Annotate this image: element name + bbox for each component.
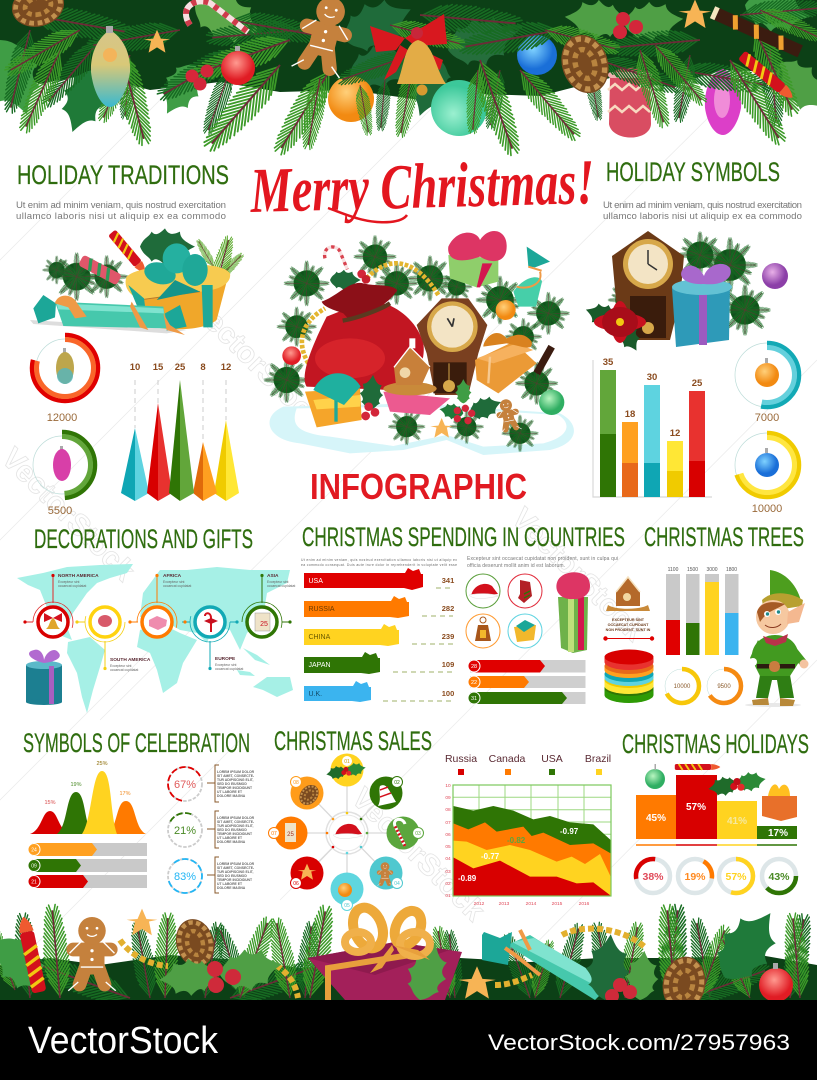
text block: 21%: SIT AMET, CONSECTE- <box>217 820 254 824</box>
pine <box>608 232 770 336</box>
text block: 21% <box>207 811 255 848</box>
ribbon bars: spending by country: USA <box>308 578 323 585</box>
glass bulb <box>91 26 130 107</box>
map node: africa <box>128 573 191 642</box>
holiday icons <box>645 764 797 821</box>
segment 01: 01 <box>344 759 350 765</box>
heading: decorations and gifts: DECORATIONS AND GIFTS <box>34 524 253 554</box>
text: trees caption: OCCAECAT CUPIDANT <box>608 623 649 627</box>
text block: 83%: TUR ADIPISCING ELIT, <box>217 870 254 874</box>
berries <box>186 64 214 90</box>
pine clusters <box>264 235 570 452</box>
map node: asia: ASIA <box>267 573 279 579</box>
orange bauble <box>328 76 374 122</box>
holly berries right <box>613 12 643 39</box>
segment 01 <box>325 754 367 786</box>
progress bars: spending: 28 <box>471 664 477 670</box>
area chart legend: Canada <box>489 753 526 765</box>
gold tinsel right <box>495 929 646 985</box>
ribbon bars: spending by country: 109 <box>442 660 454 669</box>
segment 07: 25 <box>287 832 294 838</box>
ribbon bars: spending by country: 282 <box>442 604 454 613</box>
area chart legend <box>445 753 611 775</box>
ribbon bars: spending by country: JAPAN <box>308 662 331 669</box>
map node: asia: Excepteur sint <box>267 580 289 584</box>
bar chart: holiday symbols: 30 <box>647 372 657 383</box>
map node: africa: AFRICA <box>163 573 182 579</box>
area chart: 01 <box>445 893 451 899</box>
wrapped candy <box>513 247 550 307</box>
snow <box>270 403 574 455</box>
star <box>144 30 170 53</box>
segment 08: 08 <box>293 780 299 786</box>
ribbon bars: spending by country: U.K. <box>308 691 322 698</box>
text block: 21%: LOREM IPSUM DOLOR <box>217 816 255 820</box>
text: trees caption <box>606 618 651 632</box>
block chart: christmas holidays <box>636 775 797 845</box>
ribbon bars: spending by country: RUSSIA <box>308 606 335 613</box>
pine branches <box>0 0 817 137</box>
map node: europe: EUROPE <box>215 656 236 662</box>
poinsettia <box>582 298 646 356</box>
area chart: 2014 <box>526 901 537 907</box>
disc stack <box>604 650 654 703</box>
text block: 83%: TEMPOR INCIDIDUNT <box>217 878 253 882</box>
area chart: 10 <box>445 783 451 789</box>
donut: 7000: 7000 <box>755 412 779 424</box>
gingerbread house <box>383 338 437 395</box>
area chart: 06 <box>445 832 451 838</box>
map node: europe: occaecat cupidatat <box>215 667 243 671</box>
bell curve chart: 17% <box>119 791 131 797</box>
segment 07: 07 <box>271 831 277 837</box>
holly left <box>0 926 59 1005</box>
area chart: 02 <box>445 881 451 887</box>
text block: 83%: SED DO EIUSMOD <box>217 874 247 878</box>
text: spending intro left: Ut enim ad minim veniam, quis nostrud exercitation ullamco laboris nisi ut aliquip ex <box>301 558 457 562</box>
footer bar: VectorStock <box>28 1020 219 1062</box>
map node: europe <box>182 602 243 671</box>
text block: 67% <box>207 765 255 802</box>
area chart: 2013 <box>499 901 510 907</box>
holly centre right <box>583 932 661 1003</box>
large gift <box>308 903 462 1005</box>
text: holiday symbols intro: ullamco laboris nisi ut aliquip ex ea commodo <box>603 211 802 222</box>
background watermark: VectorStock <box>345 782 491 928</box>
area chart <box>445 783 611 907</box>
donut: 38% <box>633 856 673 896</box>
segment 03: 03 <box>415 831 421 837</box>
map node: asia: occaecat cupidatat <box>267 584 295 588</box>
segment 06 <box>290 856 324 890</box>
text block: 83%: SIT AMET, CONSECTE- <box>217 866 254 870</box>
block chart: christmas holidays: 45% <box>646 813 666 824</box>
pine branches <box>12 904 816 1010</box>
red bow <box>370 14 447 80</box>
area chart legend: USA <box>541 753 563 765</box>
bar chart: christmas trees: 1100 <box>668 567 679 573</box>
blue bauble <box>517 35 557 75</box>
text: holiday symbols intro: Ut enim ad minim veniam, quis nostrud exercitation <box>603 200 802 211</box>
text block: 67%: TEMPOR INCIDIDUNT <box>217 786 253 790</box>
text: holiday traditions intro <box>16 200 226 222</box>
wrapped candy <box>482 930 610 1000</box>
berries on top <box>357 270 370 284</box>
donut: 38%: 38% <box>642 871 664 883</box>
donut: 19% <box>672 853 718 899</box>
cone chart: 12 <box>221 362 231 373</box>
cone chart: 15 <box>153 362 164 373</box>
heading: christmas spending: CHRISTMAS SPENDING IN COUNTRIES <box>302 522 625 552</box>
yellow gift <box>305 373 362 427</box>
heading: christmas sales: CHRISTMAS SALES <box>274 726 432 756</box>
text block: 83%: DOLORE MAGNA <box>217 886 246 890</box>
holly and berries left <box>358 374 385 420</box>
text: holiday traditions intro: Ut enim ad minim veniam, quis nostrud exercitation <box>16 200 226 211</box>
donut: 5500: 5500 <box>48 505 72 517</box>
progress bars: celebration: 21 <box>31 880 37 886</box>
dark rocket <box>710 6 803 57</box>
text block: 21%: SED DO EIUSMOD <box>217 828 247 832</box>
ribbon bars: spending by country: 239 <box>442 632 454 641</box>
text block: 67%: SIT AMET, CONSECTE- <box>217 774 254 778</box>
cone chart <box>121 362 239 501</box>
map node: south america: Excepteur sint <box>110 664 132 668</box>
striped rocket <box>738 51 796 102</box>
heading: infographic: INFOGRAPHIC <box>310 466 527 507</box>
donut: 10000: 10000 <box>752 503 782 515</box>
map node: north america: occaecat cupidatat <box>58 584 86 588</box>
ribbon bars: spending by country: 341 <box>442 576 454 585</box>
dashed gauge: 21%: 21% <box>174 825 196 837</box>
progress bars: celebration <box>28 843 147 888</box>
text block: 21%: TEMPOR INCIDIDUNT <box>217 832 253 836</box>
red line marker <box>603 636 654 641</box>
pink bulb <box>705 68 741 135</box>
donut: 57% <box>719 859 753 893</box>
area chart: -0.77 <box>481 852 500 861</box>
tinsel <box>302 263 438 363</box>
segment 05 <box>330 872 364 910</box>
dark holly <box>140 228 195 265</box>
map node: north america <box>23 573 99 642</box>
candy cane <box>186 1 248 32</box>
star left <box>127 909 157 935</box>
tall gift <box>556 572 590 653</box>
gold tinsel left <box>120 940 298 998</box>
background watermark: VectorStock <box>185 292 331 438</box>
heading: holiday traditions: HOLIDAY TRADITIONS <box>17 160 229 190</box>
donut: 43%: 43% <box>768 871 790 883</box>
pink box <box>383 392 450 415</box>
segment 03 <box>386 816 424 850</box>
text: spending intro right <box>467 556 618 569</box>
map node: south america <box>75 602 151 672</box>
illustration: right clock and gift <box>582 231 788 356</box>
segment 02: 02 <box>394 780 400 786</box>
ribbon bars: spending by country: CHINA <box>308 634 331 641</box>
block chart: christmas holidays: 41% <box>727 816 747 827</box>
area chart: -0.97 <box>560 827 579 836</box>
illustration: left gifts <box>30 228 246 335</box>
text block: 67%: LOREM IPSUM DOLOR <box>217 770 255 774</box>
map node: europe: Excepteur sint <box>215 663 237 667</box>
gift box on map <box>26 650 62 705</box>
red bauble <box>282 346 301 365</box>
donut: 57%: 57% <box>725 871 747 883</box>
progress bars: celebration: 09 <box>31 864 37 870</box>
text block: 21%: TUR ADIPISCING ELIT, <box>217 824 254 828</box>
segment 04 <box>370 856 402 890</box>
donut: 19%: 19% <box>684 871 706 883</box>
holly and berries right <box>438 379 505 424</box>
area chart: -0.82 <box>507 836 526 845</box>
pinecone <box>171 915 219 971</box>
donut: 5500 <box>29 432 95 517</box>
bell curve chart <box>30 761 146 834</box>
ribbon bars: spending by country <box>304 568 454 702</box>
gold bell <box>397 40 446 96</box>
donut: 7000 <box>735 343 799 424</box>
cone chart: 10 <box>130 362 140 373</box>
berries on bow <box>411 27 423 39</box>
area chart: 07 <box>445 820 451 826</box>
bar chart: holiday symbols: 35 <box>603 357 614 368</box>
pinecone right <box>658 953 710 1015</box>
area chart: 08 <box>445 807 451 813</box>
mitten <box>608 68 652 138</box>
rocket up <box>108 230 148 275</box>
donut: 12000 <box>32 335 98 424</box>
cone chart: 25 <box>175 362 186 373</box>
donut: 43% <box>762 859 796 893</box>
segment 07 <box>268 816 308 850</box>
area chart legend: Russia <box>445 753 477 765</box>
map node: asia <box>242 573 295 642</box>
text block: 21%: DOLORE MAGNA <box>217 840 246 844</box>
red ball <box>759 963 793 1002</box>
rocket pink <box>78 255 122 285</box>
blue gift <box>672 264 732 347</box>
pinecone right <box>554 29 616 99</box>
text: spending intro right: officia deserunt mollit anim id est laborum. <box>467 563 565 569</box>
holly leaves behind <box>0 0 817 140</box>
green bauble <box>539 390 564 415</box>
world map <box>17 564 293 713</box>
illustration: central Christmas still life <box>264 231 574 455</box>
holly right <box>703 898 792 993</box>
segment 06: 06 <box>293 881 299 887</box>
bar chart: christmas trees: 3000 <box>706 567 718 573</box>
orange bauble <box>496 300 516 320</box>
segment 08 <box>290 776 324 810</box>
text block: 67%: SED DO EIUSMOD <box>217 782 247 786</box>
yellow gift <box>126 243 230 329</box>
progress bars: spending: 22 <box>471 680 477 686</box>
holly berries <box>157 944 285 999</box>
map node: south america: occaecat cupidatat <box>110 668 138 672</box>
text block: 21%: UT LABORE ET <box>217 836 243 840</box>
ribbon bars: spending by country: 100 <box>442 689 454 698</box>
text: holiday traditions intro: ullamco laboris nisi ut aliquip ex ea commodo <box>16 211 226 222</box>
donut: trees 9500: 9500 <box>717 684 731 690</box>
segment 04: 04 <box>394 881 400 887</box>
bell curve chart: 25% <box>96 761 108 767</box>
donut: 12000: 12000 <box>47 412 77 424</box>
heading: symbols of celebration: SYMBOLS OF CELEBRATION <box>23 728 250 758</box>
bar chart: christmas trees <box>666 567 738 655</box>
dashed gauge: 21% <box>162 807 208 853</box>
bar chart: holiday symbols: 18 <box>625 409 635 420</box>
area chart: 05 <box>445 844 451 850</box>
area chart: -0.89 <box>458 874 477 883</box>
footer bar: VectorStock.com/27957963 <box>488 1030 790 1055</box>
text block: 83%: UT LABORE ET <box>217 882 243 886</box>
wall clock <box>612 231 684 340</box>
pine sprigs <box>42 253 128 301</box>
gingerbread man <box>494 397 522 433</box>
dashed gauge: 83%: 83% <box>174 871 196 883</box>
map node: africa: Excepteur sint <box>163 580 185 584</box>
segment 05: 05 <box>344 903 350 909</box>
star right <box>678 0 712 28</box>
bar chart: holiday symbols: 25 <box>692 378 703 389</box>
rocket <box>16 915 46 994</box>
map node: asia: 25 <box>260 621 268 628</box>
teal bauble <box>431 80 487 136</box>
text block: 67%: TUR ADIPISCING ELIT, <box>217 778 254 782</box>
bottom garland <box>0 898 817 1015</box>
text: trees caption: EXCEPTEUR SINT <box>612 618 645 622</box>
star centre <box>458 966 496 999</box>
area chart: 03 <box>445 869 451 875</box>
bell curve chart: 15% <box>44 800 56 806</box>
icon circles: spending <box>466 574 542 648</box>
block chart: christmas holidays: 17% <box>768 828 788 839</box>
teal candy <box>33 295 187 335</box>
candy cane <box>325 247 347 269</box>
cone chart: 8 <box>200 362 206 373</box>
script title: Merry Christmas! <box>249 146 595 226</box>
footer bar <box>0 1000 817 1080</box>
dashed gauge: 67% <box>165 764 205 804</box>
gingerbread <box>292 0 358 78</box>
progress bars: celebration: 24 <box>31 848 37 854</box>
area chart legend: Brazil <box>585 753 611 765</box>
donut: trees 10000 <box>665 669 699 703</box>
text block: 67%: DOLORE MAGNA <box>217 794 246 798</box>
text: holiday symbols intro <box>603 200 802 222</box>
map node: africa: occaecat cupidatat <box>163 584 191 588</box>
text block: 83% <box>207 857 255 893</box>
area chart: 2012 <box>474 901 485 907</box>
donut: trees 9500 <box>707 669 741 703</box>
map node: south america: SOUTH AMERICA <box>110 657 151 663</box>
text: spending intro left: ea commodo consequat. Duis aute irure dolor in reprehenderit in voluptate velit esse <box>301 563 457 567</box>
light sprig <box>194 234 246 299</box>
pinecone <box>7 0 69 33</box>
area chart: 09 <box>445 795 451 801</box>
area chart: 04 <box>445 856 451 862</box>
holly behind sack <box>330 270 361 290</box>
hub diagram: christmas sales <box>268 754 424 910</box>
area chart: 2015 <box>552 901 563 907</box>
text block: 83%: LOREM IPSUM DOLOR <box>217 862 255 866</box>
donut: trees 10000: 10000 <box>674 684 691 690</box>
top garland <box>0 0 817 160</box>
santa sack <box>305 283 424 390</box>
gingerbread man <box>68 917 116 991</box>
red ball <box>221 46 255 85</box>
area chart: 2016 <box>579 901 590 907</box>
elf <box>745 570 808 707</box>
bar chart: holiday symbols: 12 <box>670 428 680 439</box>
pink top gift <box>448 231 507 287</box>
dashed gauge: 67%: 67% <box>174 779 196 791</box>
segment 02 <box>370 776 402 810</box>
donut: 10000 <box>735 433 799 515</box>
text block: 67%: UT LABORE ET <box>217 790 243 794</box>
text: spending intro right: Excepteur sint occaecat cupidatat non proident, sunt in culpa qui <box>467 556 618 562</box>
star <box>430 418 453 438</box>
rocket <box>537 347 552 373</box>
map node: north america: NORTH AMERICA <box>58 573 99 579</box>
progress bars: spending <box>468 660 586 704</box>
dashed gauge: 83% <box>161 852 209 900</box>
map node: north america: Excepteur sint <box>58 580 80 584</box>
purple bauble <box>762 263 788 289</box>
text: spending intro left <box>301 558 457 567</box>
bell curve chart: 19% <box>70 782 82 788</box>
bar chart: holiday symbols <box>593 357 712 497</box>
bar chart: christmas trees: 1500 <box>687 567 698 573</box>
gingerbread house icon <box>606 577 650 611</box>
background watermark: VectorStock <box>505 502 651 648</box>
orange gift <box>475 333 537 393</box>
text: trees caption: NON PROIDENT, SUNT IN <box>606 628 651 632</box>
block chart: christmas holidays: 57% <box>686 802 706 813</box>
script title <box>249 146 595 226</box>
mantel clock <box>417 298 487 395</box>
progress bars: spending: 31 <box>471 696 477 702</box>
bar chart: christmas trees: 1800 <box>726 567 737 573</box>
